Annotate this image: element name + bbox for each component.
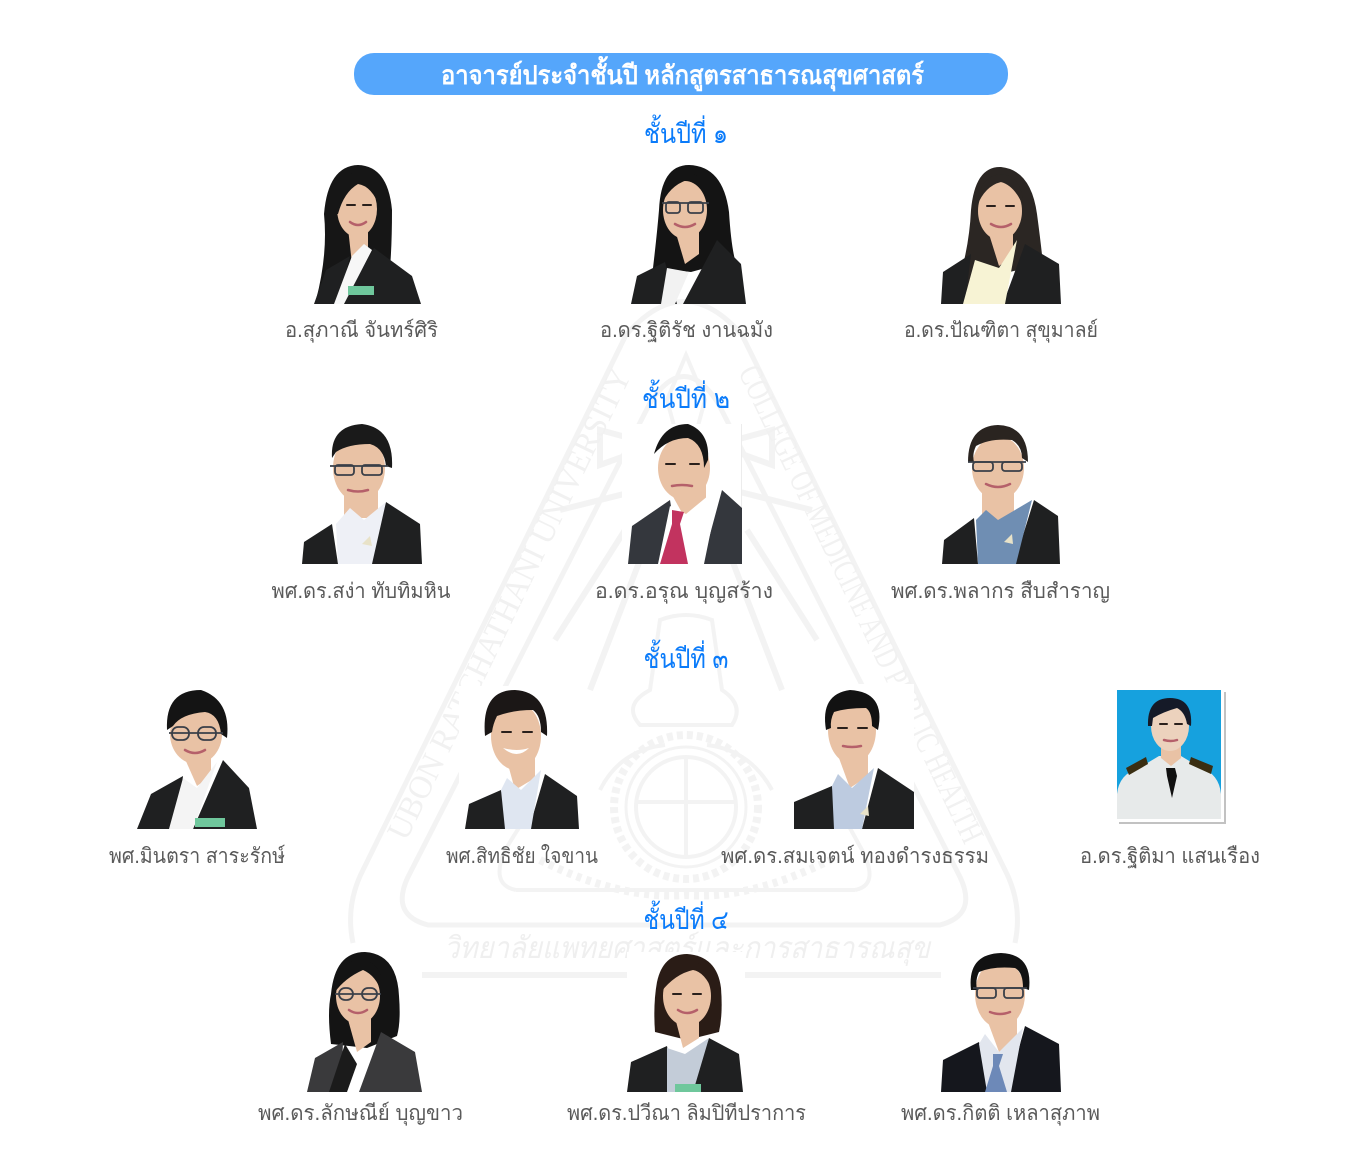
portrait: row 4 centre, white backing <box>627 952 745 1092</box>
name: row 2 centre: อ.ดร.อรุณ บุญสร้าง <box>595 580 773 604</box>
watermark: college emblem: UBON RATCHATHANI UNIVERSITY <box>381 363 639 845</box>
name: row 2 left: พศ.ดร.สง่า ทับทิมหิน <box>272 580 450 603</box>
portrait: row 3 second, white backing <box>459 686 579 829</box>
portrait: row 1 left <box>314 165 421 304</box>
heading: year 2: ชั้นปีที่ ๒ <box>642 379 730 414</box>
name: row 4 left: พศ.ดร.ลักษณีย์ บุญขาว <box>258 1101 463 1126</box>
portrait: row 3 first <box>137 690 257 829</box>
portrait: row 1 centre <box>631 165 746 304</box>
portrait: row 3 third <box>794 684 914 829</box>
name: row 1 right: อ.ดร.ปัณฑิตา สุขุมาลย์ <box>904 318 1098 343</box>
title banner <box>354 53 1008 95</box>
portrait: row 3 fourth, ID photo on blue <box>1117 690 1226 824</box>
watermark: college emblem <box>351 302 1017 975</box>
heading: year 4: ชั้นปีที่ ๔ <box>644 900 728 935</box>
portrait: row 1 right <box>941 167 1061 304</box>
heading: year 1: ชั้นปีที่ ๑ <box>644 114 728 149</box>
portrait: row 2 centre, white photo frame <box>622 424 742 564</box>
name: row 3 first: พศ.มินตรา สาระรักษ์ <box>109 844 285 868</box>
name: row 4 right: พศ.ดร.กิตติ เหลาสุภาพ <box>901 1102 1100 1126</box>
name: row 4 centre: พศ.ดร.ปวีณา ลิมปิทีปราการ <box>567 1102 806 1125</box>
name: row 1 left: อ.สุภาณี จันทร์ศิริ <box>285 318 438 343</box>
portrait: row 2 right <box>942 425 1060 564</box>
watermark: college emblem: COLLEGE OF MEDICINE AND PUBLIC HEALTH <box>731 360 990 849</box>
portrait: row 2 left <box>302 424 422 564</box>
portrait: row 4 left <box>307 952 422 1092</box>
heading: year 3: ชั้นปีที่ ๓ <box>644 639 728 674</box>
name: row 1 centre: อ.ดร.ฐิติรัช งานฉมัง <box>600 319 773 342</box>
portrait: row 4 right <box>941 953 1061 1092</box>
watermark: college emblem: วิทยาลัยแพทยศาสตร์และการสาธารณสุข <box>444 931 931 966</box>
title banner: อาจารย์ประจำชั้นปี หลักสูตรสาธารณสุขศาสตร์ <box>441 55 924 92</box>
name: row 2 right: พศ.ดร.พลากร สืบสำราญ <box>891 580 1110 603</box>
name: row 3 third: พศ.ดร.สมเจตน์ ทองดำรงธรรม <box>721 844 989 868</box>
name: row 3 second: พศ.สิทธิชัย ใจขาน <box>446 844 598 868</box>
name: row 3 fourth: อ.ดร.ฐิติมา แสนเรือง <box>1080 845 1260 868</box>
